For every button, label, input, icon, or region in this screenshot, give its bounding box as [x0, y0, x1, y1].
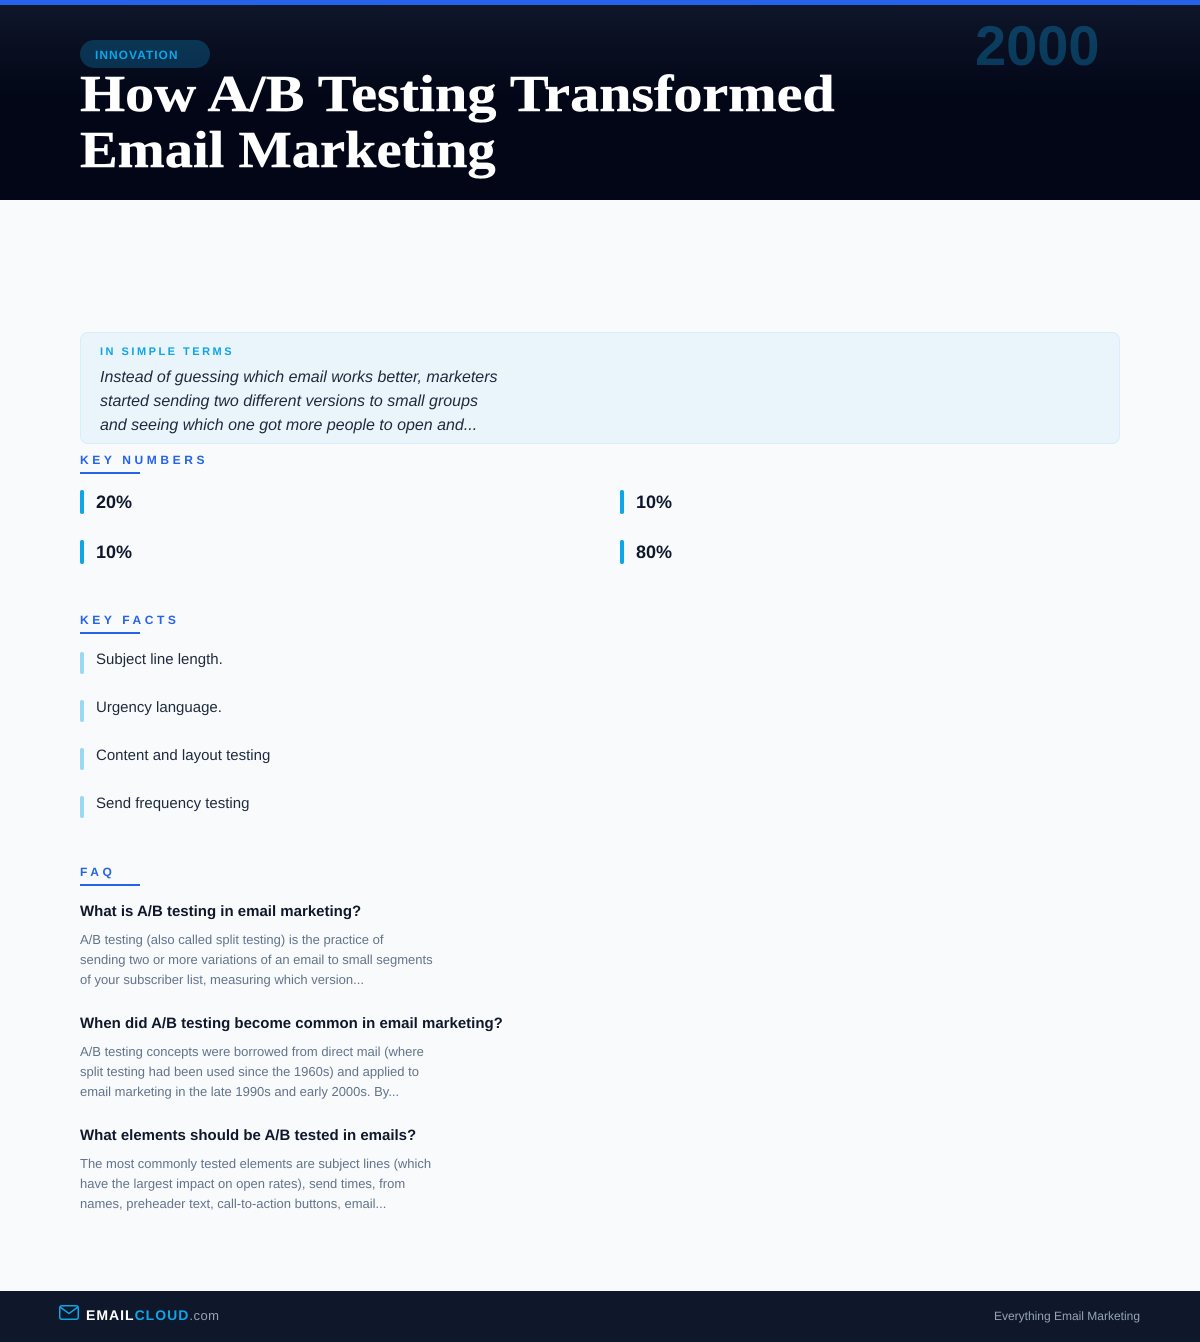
fact 4 [80, 795, 249, 818]
faq question 3: What elements should be A/B tested in emails? [80, 1127, 416, 1144]
fact 3: Content and layout testing [96, 747, 270, 764]
faq answer 2: A/B testing concepts were borrowed from direct mail (where [80, 1044, 424, 1059]
stat 20% [80, 490, 132, 514]
stat 20%: 20% [96, 492, 132, 512]
panel text: started sending two different versions to small groups [100, 393, 478, 410]
top accent bar [0, 0, 1200, 5]
category pill [80, 40, 210, 68]
panel text: and seeing which one got more people to open and... [100, 417, 477, 434]
category label: INNOVATION [95, 48, 179, 62]
faq question 2: When did A/B testing become common in email marketing? [80, 1015, 503, 1032]
stat 10% second [80, 540, 132, 564]
panel label: IN SIMPLE TERMS [100, 346, 234, 358]
fact 2: Urgency language. [96, 699, 222, 716]
title: How A/B Testing Transformed [80, 66, 835, 123]
tagline: Everything Email Marketing [994, 1309, 1140, 1323]
faq answer 2: email marketing in the late 1990s and early 2000s. By... [80, 1084, 399, 1099]
fact 1 [80, 651, 223, 674]
panel text [100, 369, 498, 434]
fact 3 [80, 747, 270, 770]
faq answer 3: The most commonly tested elements are subject lines (which [80, 1156, 431, 1171]
panel: in simple terms [80, 332, 1120, 444]
title [80, 66, 835, 179]
heading: FAQ: FAQ [80, 865, 115, 879]
faq answer 3 [80, 1156, 431, 1211]
faq answer 1: A/B testing (also called split testing) is the practice of [80, 932, 383, 947]
stat 10% [620, 490, 672, 514]
icon: envelope [59, 1305, 79, 1320]
faq answer 2: split testing had been used since the 1960s) and applied to [80, 1064, 419, 1079]
brand name: EMAILCLOUD.com [86, 1307, 220, 1323]
stat 10% second: 10% [96, 542, 132, 562]
heading: key numbers: KEY NUMBERS [80, 453, 208, 467]
faq answer 1: of your subscriber list, measuring which version... [80, 972, 364, 987]
fact 4: Send frequency testing [96, 795, 249, 812]
faq question 1: What is A/B testing in email marketing? [80, 903, 361, 920]
heading: key facts: KEY FACTS [80, 613, 180, 627]
faq answer 1 [80, 932, 433, 987]
stat 10%: 10% [636, 492, 672, 512]
fact 2 [80, 699, 222, 722]
key numbers [80, 490, 672, 564]
stat 80% [620, 540, 672, 564]
stat 80%: 80% [636, 542, 672, 562]
faq answer 2 [80, 1044, 424, 1099]
faq answer 1: sending two or more variations of an email to small segments [80, 952, 433, 967]
title: Email Marketing [80, 122, 496, 179]
fact 1: Subject line length. [96, 651, 223, 668]
footer [0, 1291, 1200, 1342]
panel text: Instead of guessing which email works better, marketers [100, 369, 498, 386]
header banner [0, 0, 1200, 200]
faq answer 3: have the largest impact on open rates), send times, from [80, 1176, 405, 1191]
faq answer 3: names, preheader text, call-to-action buttons, email... [80, 1196, 386, 1211]
year watermark: 2000 [975, 14, 1100, 77]
